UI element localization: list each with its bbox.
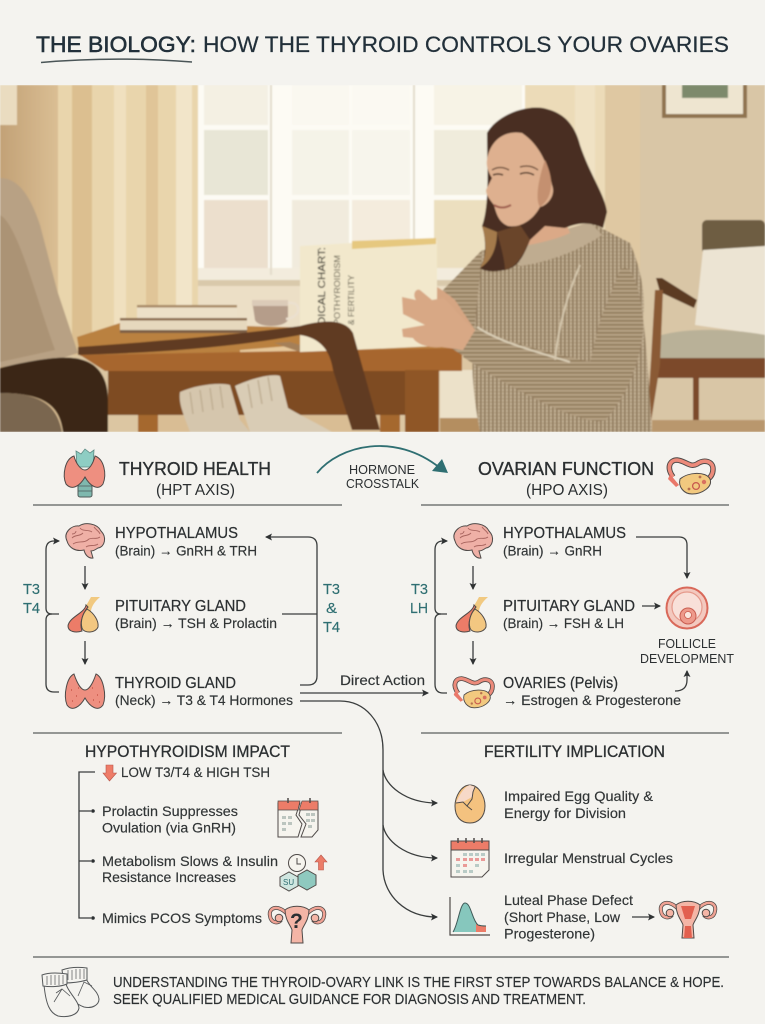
text: luteal phase defect: Luteal Phase Defect [504,892,633,908]
text: egg quality: Impaired Egg Quality & [504,788,654,804]
pituitary label: PITUITARY GLAND [503,598,635,615]
icon: ovaries [454,679,492,708]
bullet: prolactin: Ovulation (via GnRH) [102,820,236,836]
arrow: pituitary to thyroid [84,641,86,664]
panel header: ovarian function: OVARIAN FUNCTION [478,459,654,479]
panel: HPT axis [23,524,340,708]
woman [402,107,652,432]
pituitary label: PITUITARY GLAND [115,598,246,615]
icon: thyroid gland [65,674,105,708]
collar [520,222,602,266]
footer [42,967,724,1017]
title: HOW THE THYROID CONTROLS YOUR OVARIES [203,32,729,57]
bracket with T3 LH [410,541,447,693]
heading: HYPOTHYROIDISM IMPACT [85,742,290,761]
icon: clock and sugar cubes: SU [283,878,294,887]
hypothalamus label: (Brain) → GnRH [503,542,602,558]
hypothalamus label [503,525,626,558]
title [36,32,729,62]
hypothalamus label: HYPOTHALAMUS [115,525,238,542]
arrow to uterus [632,916,654,918]
panel header: thyroid health: THYROID HEALTH [119,459,271,479]
sweater body [472,222,652,432]
feedback loop right: & [326,600,337,617]
hypothalamus label: (Brain) → GnRH & TRH [115,542,257,558]
ovaries label: → Estrogen & Progesterone [503,692,681,708]
feedback loop right: T4 [323,619,340,636]
pituitary label [115,598,277,631]
armchair at right [647,220,765,432]
hypothalamus label [115,525,257,558]
face [486,132,553,226]
sleeve [463,268,643,421]
window wall below sill [197,285,527,335]
panel header: ovarian function [421,459,729,505]
books and mug [120,300,298,333]
panel: hypothyroidism impact [33,733,342,943]
bullet: metabolism [102,853,278,885]
panel header: thyroid health [33,449,342,505]
pituitary label: (Brain) → FSH & LH [503,615,624,631]
title: THE BIOLOGY: [36,32,196,57]
hand [402,283,475,350]
icon: uterus with question mark [270,906,324,943]
footer rule [33,956,729,958]
hypothalamus label: HYPOTHALAMUS [503,525,626,542]
bracket with T3 LH: T3 [411,581,428,598]
branching arrows to fertility implications [300,701,437,917]
icon: brain [66,524,105,558]
icon: uterus [661,901,715,938]
curtains [58,85,640,355]
table [77,323,462,432]
feedback loop right: T3 [323,581,340,598]
bullet: prolactin: Prolactin Suppresses [102,803,238,819]
low T3/T4 row: LOW T3/T4 & HIGH TSH [121,764,270,780]
knitted booties [180,375,332,432]
icon: brain [454,524,493,558]
panel header: ovarian function: (HPO AXIS) [526,482,608,499]
neck [513,195,570,246]
bullet tree [79,772,95,920]
icon: cracked egg [455,785,485,823]
hormone crosstalk: HORMONE [349,462,415,477]
window [197,85,525,286]
panel: fertility implication [421,733,729,942]
icon: clock and sugar cubes [280,854,327,891]
feedback bracket left: T4 [23,600,40,617]
text: menstrual cycles: Irregular Menstrual Cycles [504,850,673,866]
feedback loop right [266,537,340,685]
pituitary label [503,598,635,631]
ovaries label [503,675,681,708]
icon: baby booties [42,967,99,1017]
folder: medical chart: DICAL CHART: [317,247,328,325]
text: egg quality: Energy for Division [504,805,626,821]
direct action arrow: Direct Action [340,672,425,688]
hormone crosstalk [317,446,448,491]
text: luteal phase defect: Progesterone) [504,926,595,942]
panel header: thyroid health: (HPT AXIS) [156,482,235,499]
arrow: hypothalamus to pituitary [84,566,86,589]
thyroid gland label [115,675,293,708]
follicle development label [640,636,734,666]
chart icon: luteal phase curve [450,897,490,935]
bullet: metabolism: Resistance Increases [102,869,236,885]
arrow: pituitary to ovaries [472,641,474,664]
follicle development label: FOLLICLE [658,636,716,651]
hair back [480,107,607,271]
thyroid gland label: THYROID GLAND [115,675,236,692]
icon: pituitary gland [456,597,488,632]
icon: uterus with question mark: ? [290,910,303,933]
icon: follicle [666,588,708,628]
folder: medical chart [274,238,437,352]
arrow: hypothalamus to pituitary [472,566,474,589]
closing message: SEEK QUALIFIED MEDICAL GUIDANCE FOR DIAGNOSIS AND TREATMENT. [113,992,586,1008]
closing message [113,975,724,1008]
direct action arrow [300,672,428,693]
foreground armchair [0,178,380,432]
text: egg quality [504,788,654,821]
follicle development label: DEVELOPMENT [640,651,734,666]
text: luteal phase defect: (Short Phase, Low [504,909,621,925]
bullet: metabolism: Metabolism Slows & Insulin [102,853,278,869]
feedback bracket left: T3 [23,581,40,598]
arrows to follicle [636,537,687,691]
back sleeve [434,250,500,360]
icon: pituitary gland [68,597,100,632]
bracket with T3 LH: LH [410,600,428,617]
thyroid gland label: (Neck) → T3 & T4 Hormones [115,692,293,708]
feedback bracket left [23,541,59,692]
ovaries label: OVARIES (Pelvis) [503,675,618,692]
heading: FERTILITY IMPLICATION [484,742,665,761]
panel: HPO axis [410,524,734,708]
icon: broken calendar [278,798,318,837]
folder: medical chart: & FERTILITY [346,275,356,325]
hormone crosstalk: CROSSTALK [346,476,419,491]
bullet: prolactin [102,803,238,836]
bullet: PCOS: Mimics PCOS Symptoms [102,910,262,926]
folder: medical chart: POTHYROIDISM [332,255,342,325]
text: luteal phase defect [504,892,633,942]
icon: calendar [451,838,489,877]
hand on folder [402,290,475,350]
icon: ovary [668,460,713,494]
closing message: UNDERSTANDING THE THYROID-OVARY LINK IS THE FIRST STEP TOWARDS BALANCE & HOPE. [113,975,724,991]
icon: thyroid with trachea [64,449,105,497]
pituitary label: (Brain) → TSH & Prolactin [115,615,277,631]
hero photo: woman reading medical chart in a sunlit room [0,85,765,432]
framed picture [662,85,747,118]
